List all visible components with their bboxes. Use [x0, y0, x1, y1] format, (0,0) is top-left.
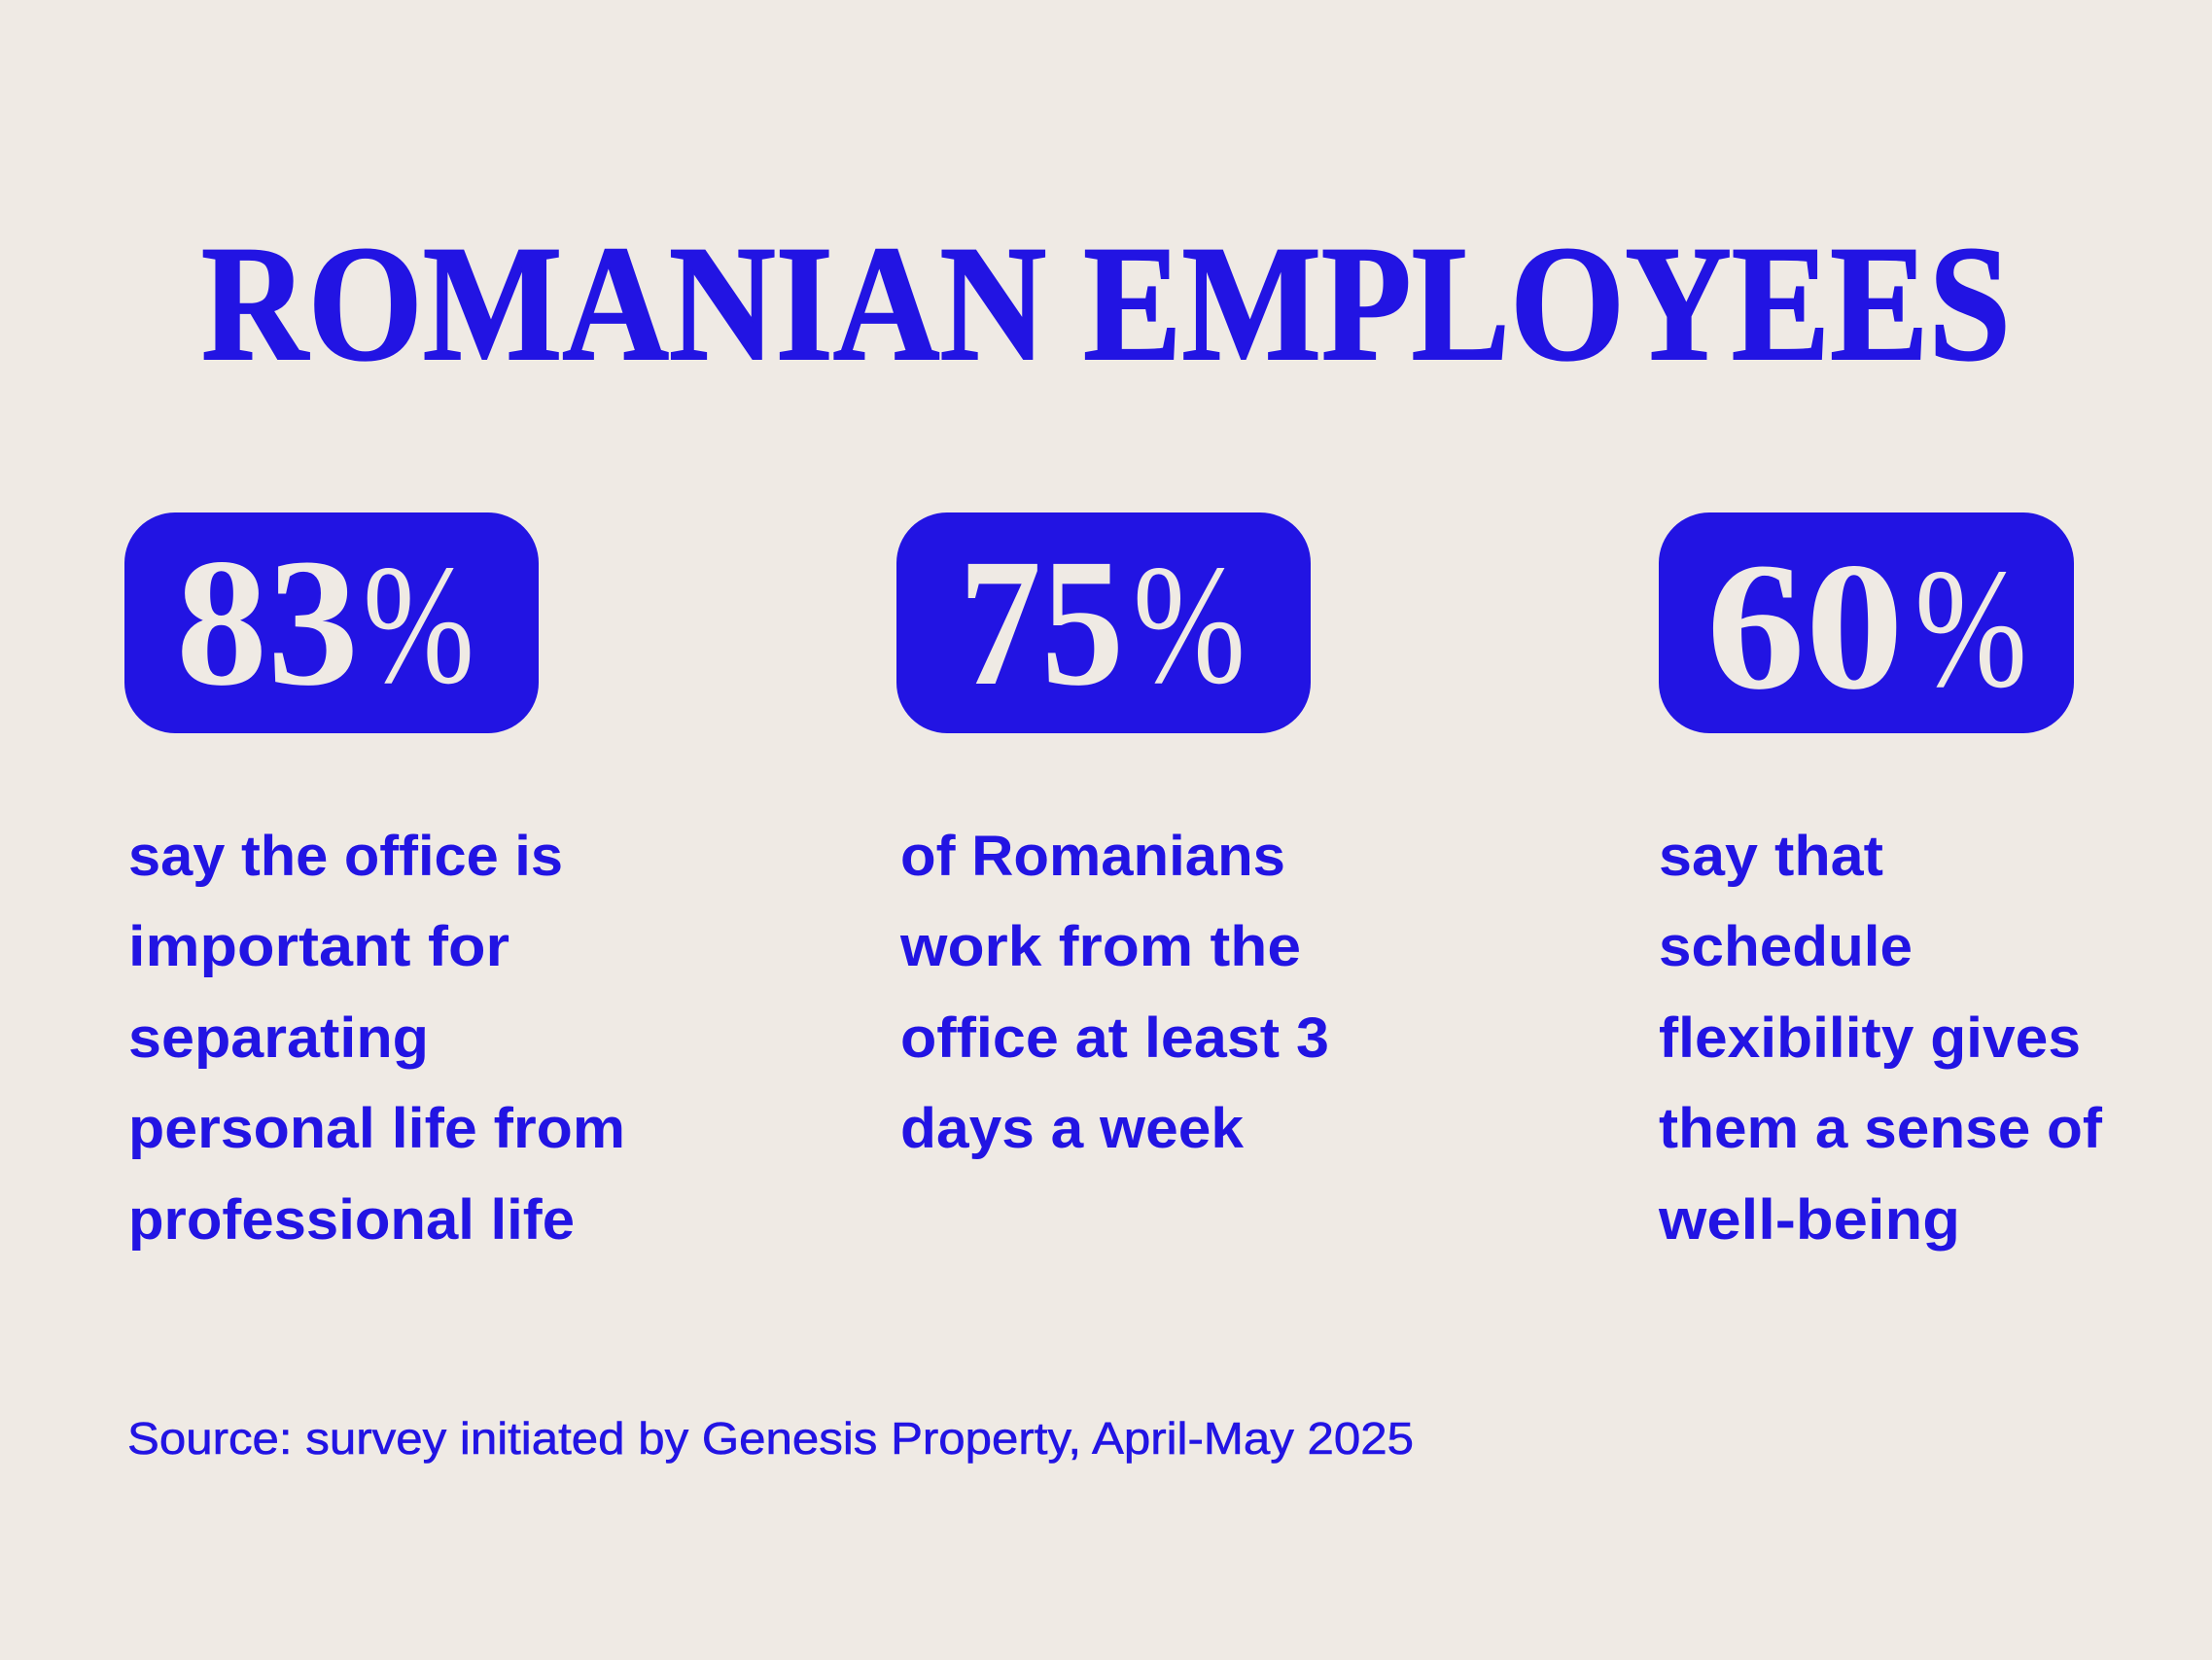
text: office separates life: professional life — [128, 1188, 575, 1252]
panel: 83 percent — [124, 512, 625, 1252]
text: schedule flexibility: flexibility gives — [1659, 1007, 2081, 1070]
text: office attendance: of Romanians — [900, 825, 1285, 888]
text: office attendance: days a week — [900, 1097, 1245, 1160]
text: schedule flexibility — [1658, 825, 2103, 1252]
text: schedule flexibility: well-being — [1658, 1188, 1960, 1252]
badge: 83%: 83 — [176, 520, 359, 724]
text: office separates life: personal life from — [128, 1097, 625, 1160]
text: office separates life: separating — [128, 1007, 429, 1070]
badge: 60%: % — [1914, 534, 2027, 724]
text: schedule flexibility: them a sense of — [1659, 1097, 2103, 1160]
text: schedule flexibility: schedule — [1659, 915, 1913, 978]
badge: 75%: % — [1133, 530, 1246, 720]
source note: Source: survey initiated by Genesis Property, April-May 2025 — [127, 1413, 1414, 1464]
panel: 75 percent — [896, 512, 1329, 1160]
badge: 75%: 75 — [959, 520, 1124, 724]
text: office attendance: work from the — [899, 915, 1301, 978]
badge: 83%: % — [363, 530, 474, 720]
badge: 60%: 60 — [1706, 524, 1904, 727]
text: office separates life: say the office is — [128, 825, 563, 888]
panel: 60 percent — [1658, 512, 2103, 1252]
text: office separates life: important for — [128, 915, 509, 978]
title: ROMANIAN EMPLOYEES — [201, 212, 2011, 395]
badge: 60% — [1659, 512, 2074, 733]
text: schedule flexibility: say that — [1659, 825, 1883, 888]
text: office separates life — [128, 825, 625, 1252]
text: office attendance: office at least 3 — [900, 1007, 1329, 1070]
text: office attendance — [899, 825, 1329, 1160]
badge: 75% — [896, 512, 1311, 733]
badge: 83% — [124, 512, 539, 733]
